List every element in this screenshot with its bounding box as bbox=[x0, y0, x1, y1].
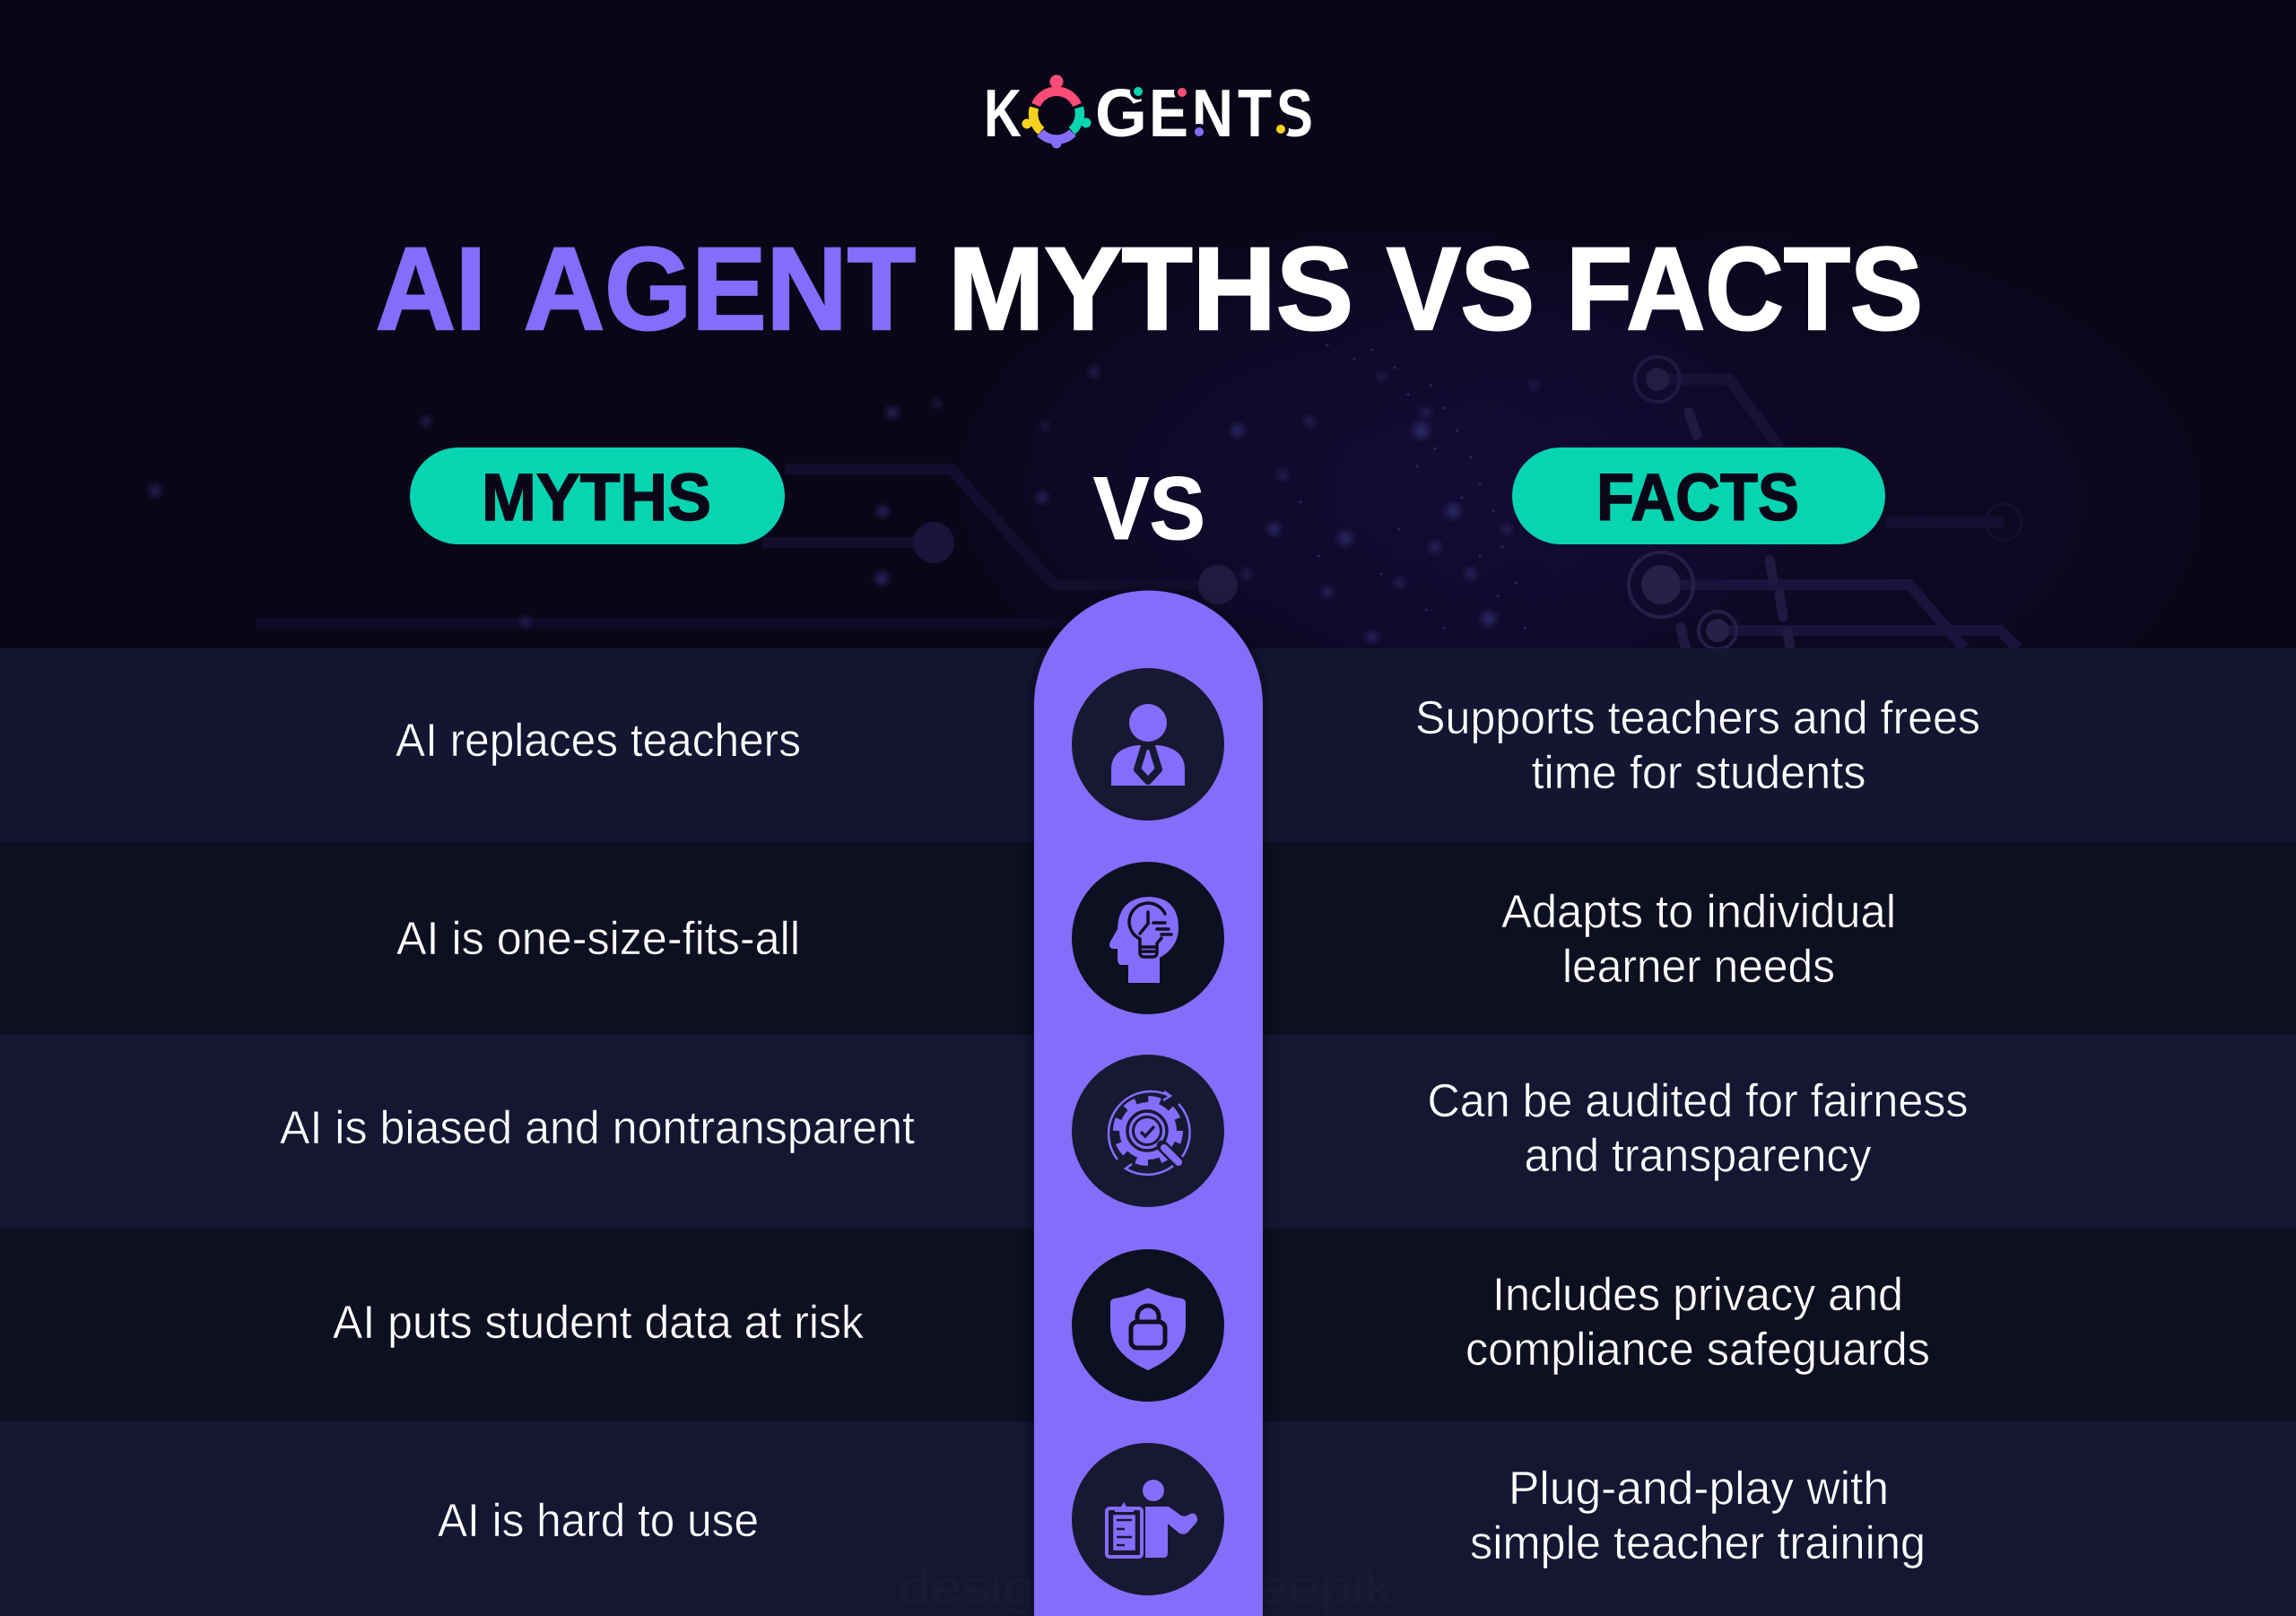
row 2 fact bbox=[1501, 886, 1896, 993]
row 2 fact: Adapts to individual bbox=[1501, 886, 1896, 938]
row 3 fact: and transparency bbox=[1525, 1130, 1871, 1182]
row 1 fact: Supports teachers and frees bbox=[1415, 692, 1980, 744]
logo: N bbox=[1192, 75, 1233, 151]
icon: teacher bbox=[1072, 668, 1224, 821]
title: MYTHS bbox=[948, 222, 1353, 354]
row 3 fact bbox=[1428, 1075, 1968, 1182]
row 4 fact bbox=[1465, 1269, 1930, 1376]
row 4 fact: compliance safeguards bbox=[1465, 1324, 1930, 1376]
icon: head with bulb bbox=[1072, 862, 1224, 1014]
title: VS bbox=[1387, 222, 1535, 354]
logo: S bbox=[1276, 75, 1313, 151]
title: AGENT bbox=[524, 222, 916, 354]
row bands bbox=[0, 648, 2296, 1616]
row 5 myth: AI is hard to use bbox=[438, 1495, 759, 1547]
logo: K bbox=[984, 75, 1022, 151]
icon: gear audit bbox=[1072, 1055, 1224, 1207]
row 5 fact: simple teacher training bbox=[1470, 1517, 1926, 1569]
logo: E bbox=[1149, 75, 1188, 151]
logo bbox=[984, 75, 1313, 151]
title bbox=[376, 222, 1923, 354]
pill: facts: FACTS bbox=[1596, 460, 1799, 534]
pill: myths bbox=[410, 447, 785, 544]
vs label: VS bbox=[1093, 458, 1205, 558]
row 2 myth: AI is one-size-fits-all bbox=[396, 913, 800, 965]
title: AI bbox=[376, 222, 486, 354]
logo: T bbox=[1238, 75, 1272, 151]
watermark: designed by freepik bbox=[899, 1562, 1394, 1614]
row 5 fact bbox=[1470, 1463, 1926, 1569]
icon: person with clipboard bbox=[1072, 1443, 1224, 1595]
row 5 fact: Plug-and-play with bbox=[1509, 1463, 1889, 1515]
pill: facts bbox=[1512, 447, 1885, 544]
central column bbox=[1031, 588, 1265, 1616]
row 3 fact: Can be audited for fairness bbox=[1428, 1075, 1968, 1127]
row 3 myth: AI is biased and nontransparent bbox=[280, 1102, 916, 1154]
icon: shield lock bbox=[1072, 1249, 1224, 1402]
pill: myths: MYTHS bbox=[482, 460, 711, 534]
row 1 fact: time for students bbox=[1532, 747, 1866, 799]
row 2 fact: learner needs bbox=[1562, 941, 1835, 993]
row 4 fact: Includes privacy and bbox=[1492, 1269, 1903, 1321]
row 1 fact bbox=[1415, 692, 1980, 799]
logo: G bbox=[1095, 75, 1147, 151]
row 1 myth: AI replaces teachers bbox=[396, 715, 801, 767]
row 4 myth: AI puts student data at risk bbox=[333, 1297, 865, 1349]
title: FACTS bbox=[1566, 222, 1923, 354]
